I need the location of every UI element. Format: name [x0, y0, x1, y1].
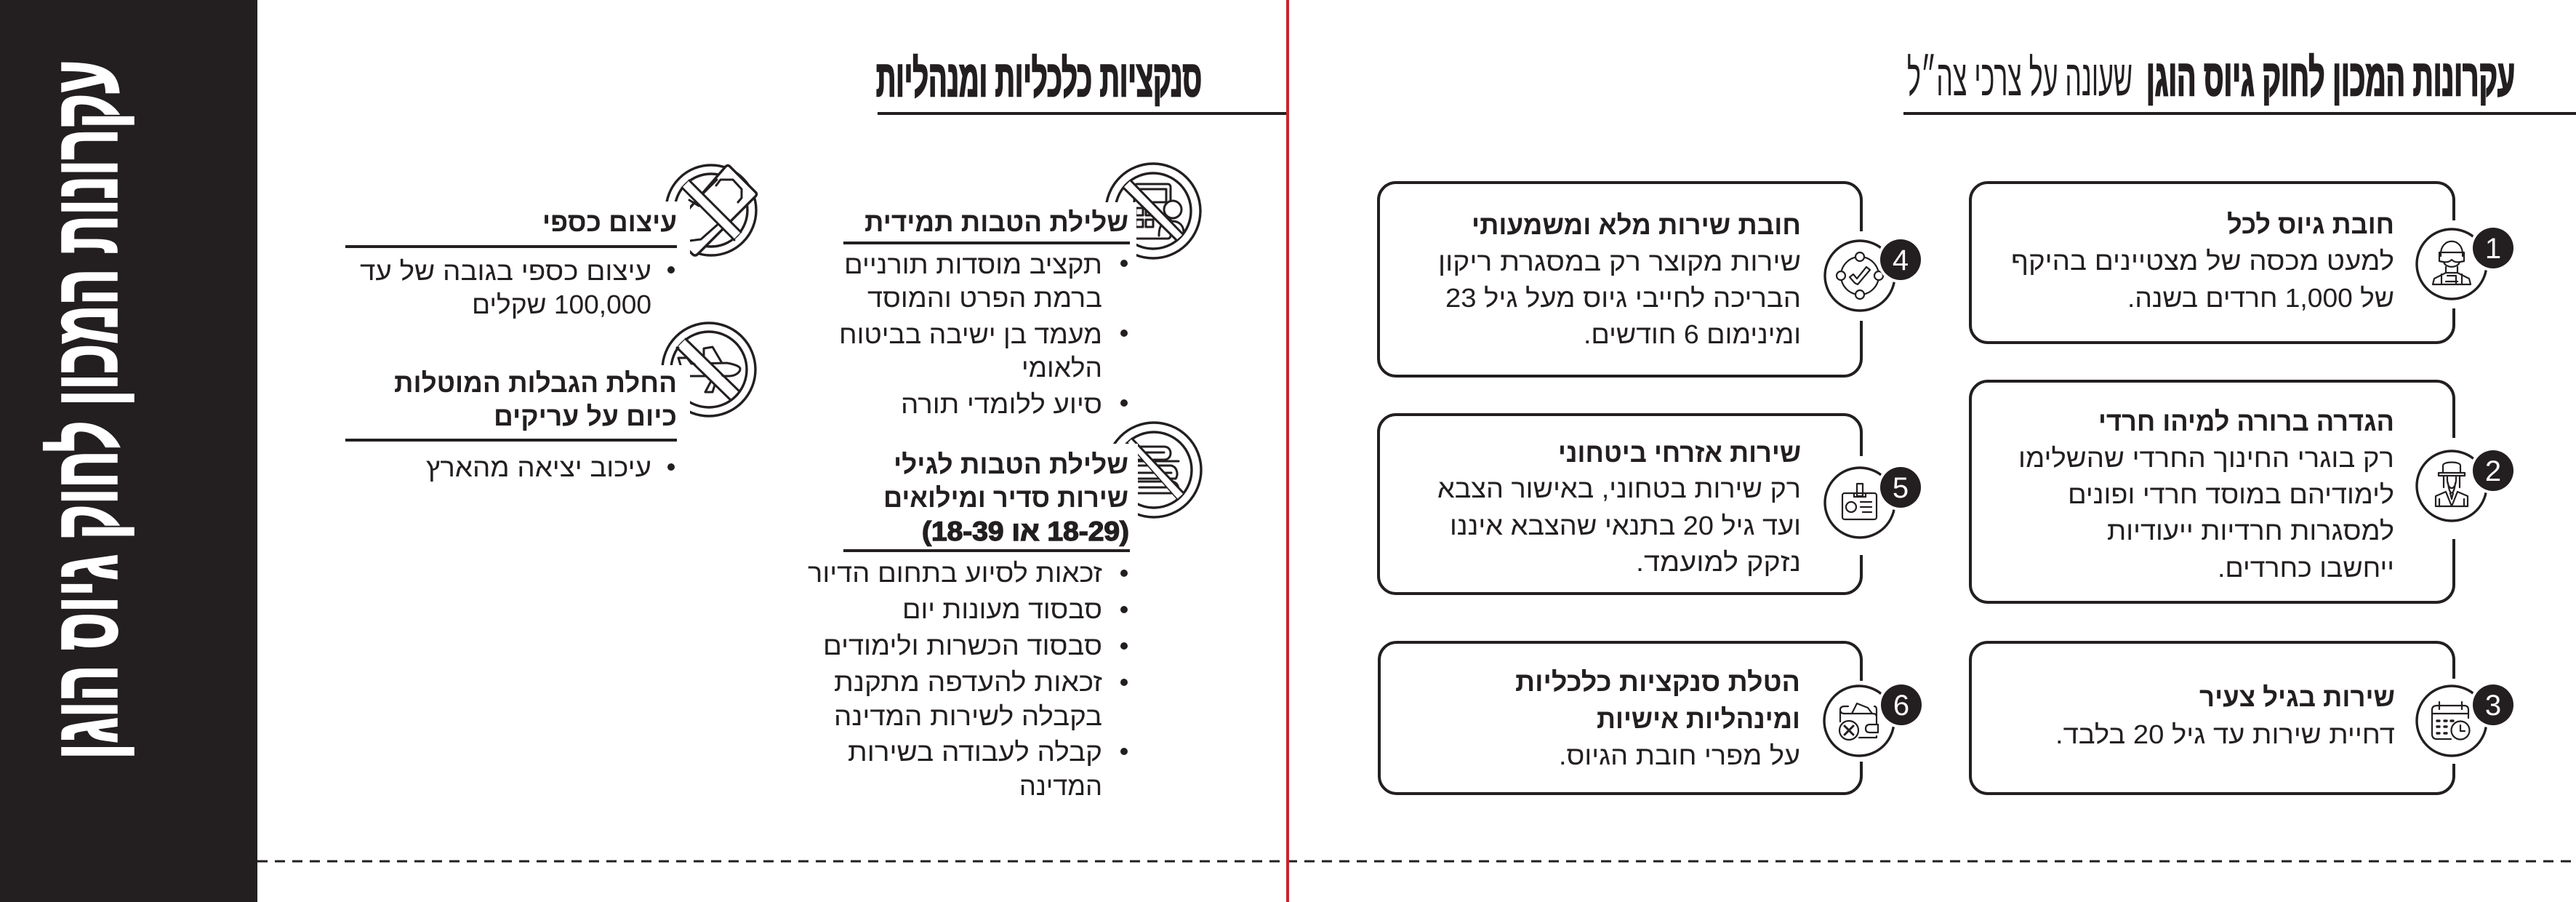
card 2: clear definition of Haredi: הגדרה ברורה למיהו חרדי: [2098, 407, 2394, 436]
card 5: civil security service: [1379, 415, 1924, 594]
card 6: personal sanctions: ומינהליות אישיות: [1597, 704, 1800, 734]
card 3: service at a young age: שירות בגיל צעיר: [2199, 682, 2395, 712]
card 4: full and meaningful service: שירות מקוצר רק במסגרת ריקון: [1438, 247, 1801, 276]
panel: restrictions on deserters: [345, 323, 755, 482]
icon: crossed-out plane: [662, 323, 755, 416]
card 4: full and meaningful service: ומינימום 6 חודשים.: [1584, 319, 1801, 349]
heading: sanctions: [876, 50, 1286, 115]
bullet list: age-based benefits: קבלה לעבודה בשירות: [848, 737, 1102, 767]
badge: number 6: [1878, 682, 1925, 728]
heading: lifting restrictions: [345, 368, 677, 442]
badge: number 1: [2470, 225, 2516, 271]
card 5: civil security service: שירות אזרחי ביטחוני: [1558, 438, 1801, 468]
badge: number 6: 6: [1893, 690, 1909, 722]
panel: permanent benefit denial: [836, 164, 1200, 419]
bullet list: permanent benefits: מעמד בן ישיבה בביטוח: [839, 319, 1102, 349]
heading: financial penalty: עיצום כספי: [542, 207, 677, 237]
icon: crossed-out money: [666, 165, 756, 255]
icon: calendar and clock: [2417, 686, 2487, 756]
card 2: clear definition of Haredi: למסגרות חרדיות ייעודיות: [2107, 516, 2394, 546]
badge: number 3: [2470, 682, 2516, 728]
bullet list: age-based benefits: בקבלה לשירות המדינה: [834, 701, 1102, 731]
heading: principles: שעונה על צרכי צה״ל: [1907, 49, 2132, 106]
bullet list: age-based benefits: [808, 558, 1128, 801]
badge: number 3: 3: [2485, 690, 2501, 722]
bullet list: age-based benefits: סבסוד הכשרות ולימודים: [823, 631, 1102, 660]
card 3: service at a young age: [1970, 642, 2516, 794]
panel: black sidebar with vertical title: [0, 0, 257, 902]
panel: benefit denial by age: [808, 423, 1201, 801]
heading: permanent benefit denial: שלילת הטבות תמידית: [864, 207, 1128, 237]
card 5: civil security service: נזקק למועמד.: [1636, 547, 1801, 577]
heading: lifting restrictions: החלת הגבלות המוטלות: [394, 368, 677, 398]
icon: crossed-out books: [1107, 423, 1201, 517]
heading: financial penalty: [345, 207, 677, 248]
bullet list: permanent benefits: סיוע ללומדי תורה: [901, 389, 1102, 419]
badge: number 1: 1: [2485, 233, 2501, 265]
card 4: full and meaningful service: חובת שירות מלא ומשמעותי: [1472, 210, 1801, 240]
card 2: clear definition of Haredi: ייחשבו כחרדים.: [2218, 553, 2394, 583]
heading: sanctions: סנקציות כלכליות ומנהליות: [876, 50, 1202, 107]
panel: financial penalty: [345, 165, 756, 319]
card 4: full and meaningful service: הבריכה לחייבי גיוס מעל גיל 23: [1445, 283, 1801, 313]
bullet list: age-based benefits: זכאות להעדפה מתקנת: [834, 667, 1102, 697]
card 6: personal sanctions: על מפרי חובת הגיוס.: [1559, 741, 1800, 770]
bullet list: permanent benefits: הלאומי: [1022, 353, 1102, 383]
bullet: financial penalty amount: עיצום כספי בגובה של עד: [360, 256, 651, 286]
card 1: conscription for all: של 1,000 חרדים בשנה.: [2127, 283, 2394, 313]
icon: soldier: [2417, 229, 2487, 299]
heading: benefit denial by age: שירות סדיר ומילואים: [883, 483, 1128, 513]
badge: number 4: 4: [1893, 244, 1909, 276]
bullet list: permanent benefits: ברמת הפרט והמוסד: [867, 283, 1102, 313]
card 6: personal sanctions: הטלת סנקציות כלכליות: [1515, 667, 1800, 697]
heading: benefit denial by age: [843, 450, 1130, 552]
bullet: financial penalty amount: 100,000 שקלים: [472, 290, 651, 319]
card 6: personal sanctions: [1379, 642, 1925, 794]
bullet list: age-based benefits: המדינה: [1019, 771, 1102, 801]
icon: network with check mark: [1825, 241, 1895, 311]
heading: benefit denial by age: שלילת הטבות לגילי: [894, 450, 1128, 479]
bullet list: permanent benefits: [839, 250, 1128, 419]
heading: benefit denial by age: (18-29 או 18-39): [922, 516, 1129, 546]
card 5: civil security service: ועד גיל 20 בתנאי שהצבא איננו: [1450, 511, 1801, 540]
badge: number 5: 5: [1893, 472, 1909, 504]
card 2: clear definition of Haredi: [1970, 381, 2516, 602]
bullet: financial penalty amount: [360, 256, 675, 319]
card 1: conscription for all: [1970, 183, 2516, 343]
bullet list: permanent benefits: תקציב מוסדות תורניים: [844, 250, 1102, 279]
card 4: full and meaningful service: [1379, 183, 1924, 376]
heading: lifting restrictions: כיום על עריקים: [494, 402, 677, 431]
card 2: clear definition of Haredi: רק בוגרי החינוך החרדי שהשלימו: [2018, 443, 2394, 473]
card 5: civil security service: רק שירות בטחוני, באישור הצבא: [1437, 474, 1801, 503]
icon: ID badge: [1825, 468, 1895, 538]
card 3: service at a young age: דחיית שירות עד גיל 20 בלבד.: [2055, 719, 2395, 749]
badge: number 4: [1877, 236, 1924, 283]
card 2: clear definition of Haredi: לימודיהם במוסד חרדי ופונים: [2068, 479, 2394, 509]
bullet list: age-based benefits: סבסוד מעונות יום: [902, 594, 1102, 624]
icon: crossed-out calculator: [1106, 164, 1200, 258]
card 1: conscription for all: למעט מכסה של מצטיינים בהיקף: [2011, 246, 2394, 276]
bullet list: age-based benefits: זכאות לסיוע בתחום הדיור: [808, 558, 1102, 588]
icon: Haredi man: [2417, 451, 2487, 521]
badge: number 2: 2: [2485, 455, 2501, 487]
heading: principles: [1903, 49, 2576, 115]
bullet: exit delay: עיכוב יציאה מהארץ: [426, 452, 651, 482]
badge: number 2: [2470, 447, 2516, 494]
card 1: conscription for all: חובת גיוס לכל: [2227, 209, 2394, 239]
badge: number 5: [1877, 464, 1924, 511]
icon: wallet with X coin: [1824, 686, 1894, 756]
